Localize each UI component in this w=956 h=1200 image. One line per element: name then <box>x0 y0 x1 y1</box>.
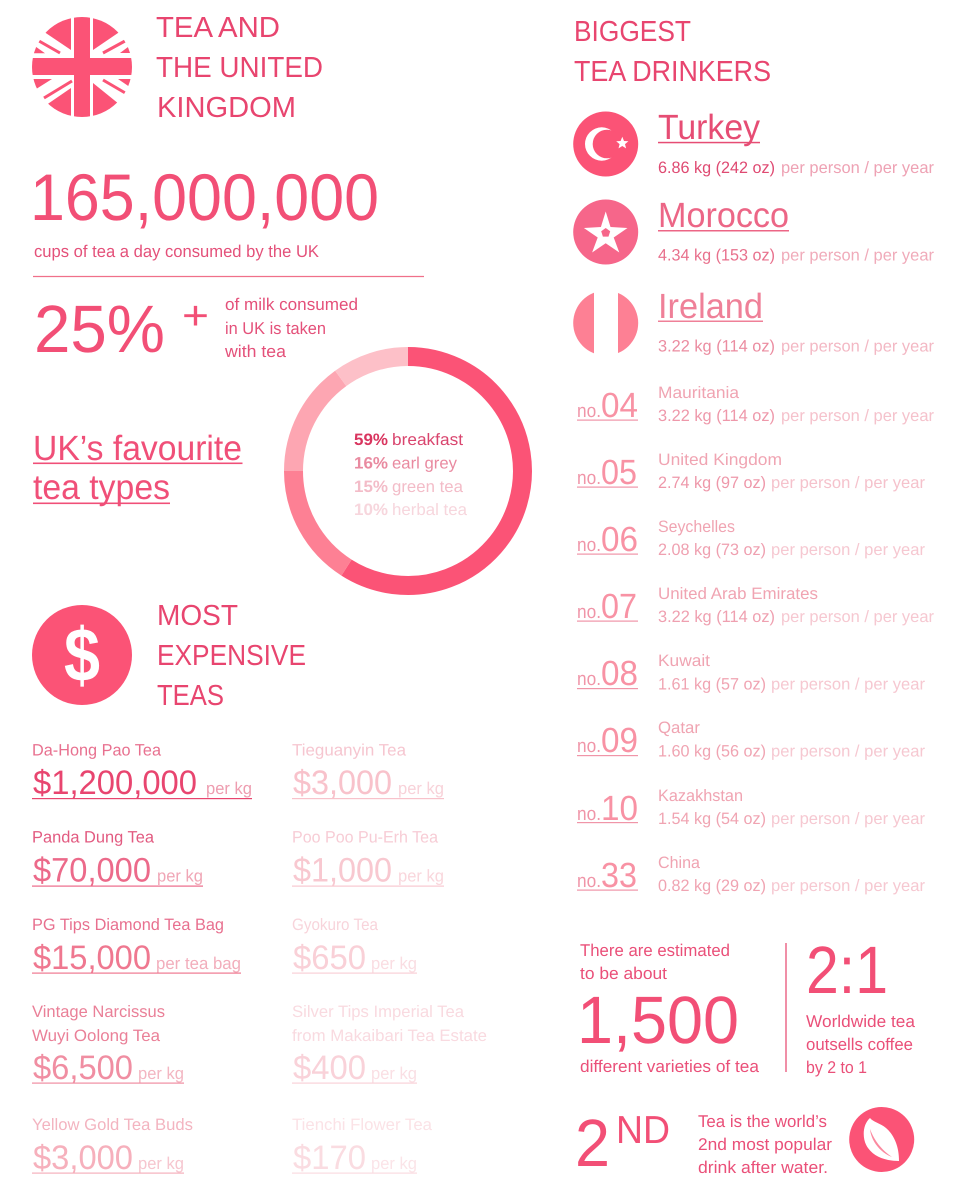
heading: most expensive teas <box>157 600 306 712</box>
expensive tea 3: per tea bag <box>156 954 241 973</box>
big stat: cups of tea a day: 165,000,000 <box>30 160 379 234</box>
country: ireland: 3.22 kg (114 oz) <box>658 338 775 356</box>
stat: 2nd <box>575 1106 670 1181</box>
donut legend: breakfast <box>392 431 463 449</box>
icon: dollar <box>32 605 132 705</box>
donut legend: herbal tea <box>392 501 468 519</box>
icon: union jack <box>32 17 132 117</box>
expensive tea 9: from Makaibari Tea Estate <box>292 1027 487 1045</box>
heading: biggest tea drinkers: BIGGEST <box>574 16 691 48</box>
icon: tea leaf <box>849 1107 914 1172</box>
icon: dollar: $ <box>64 613 100 698</box>
rank row: mauritania: no. <box>577 401 601 422</box>
rank row: seychelles: 06 <box>601 520 638 559</box>
rank row: united arab emirates: United Arab Emirates <box>658 585 818 603</box>
expensive tea 2: per kg <box>157 866 203 886</box>
stat: 2:1: Worldwide tea <box>806 1012 916 1031</box>
expensive tea 8: $650 <box>293 939 366 977</box>
country: ireland: per person / per year <box>781 338 934 356</box>
rank row: united kingdom: United Kingdom <box>658 451 782 469</box>
rank row: china: 33 <box>601 856 637 895</box>
stat: 1,500 varieties: 1,500 <box>577 983 739 1058</box>
expensive tea 8: per kg <box>371 954 417 973</box>
country: morocco: per person / per year <box>781 246 934 264</box>
title: tea and the united kingdom <box>156 12 323 124</box>
donut legend: 10% <box>354 501 388 519</box>
text: second most popular drink <box>698 1112 832 1177</box>
rank row: united kingdom: 2.74 kg (97 oz) <box>658 474 766 492</box>
expensive tea 8 <box>292 916 417 977</box>
rank row: kuwait: no. <box>577 669 601 690</box>
expensive tea 9 <box>292 1003 487 1087</box>
stat: 25% of milk: 25% <box>34 292 165 367</box>
stat: 1,500 varieties: to be about <box>580 964 667 983</box>
stat: 25% of milk: + <box>182 294 209 338</box>
stat: 25% of milk: with tea <box>224 342 287 361</box>
rank row: qatar: 1.60 kg (56 oz) <box>658 742 766 760</box>
heading: most expensive teas: TEAS <box>157 680 224 712</box>
icon: morocco flag <box>573 200 638 264</box>
donut legend <box>354 431 468 519</box>
rank row: seychelles: per person / per year <box>771 541 926 559</box>
expensive tea 4: per kg <box>138 1064 184 1083</box>
expensive tea 10 <box>292 1116 433 1177</box>
rank row: kazakhstan: per person / per year <box>771 810 926 828</box>
rank row: seychelles: Seychelles <box>658 518 735 536</box>
rank row: china: 0.82 kg (29 oz) <box>658 877 766 895</box>
expensive tea 9: $400 <box>293 1049 366 1087</box>
expensive tea 3: $15,000 <box>33 939 151 977</box>
expensive tea 10: per kg <box>371 1154 417 1173</box>
country: turkey: Turkey <box>658 108 760 147</box>
stat: 1,500 varieties: There are estimated <box>580 941 730 960</box>
donut legend: 15% <box>354 478 388 496</box>
rank row: qatar: per person / per year <box>771 742 926 760</box>
rank row: qatar: 09 <box>601 721 638 760</box>
heading: most expensive teas: EXPENSIVE <box>157 640 306 672</box>
rank row: china: China <box>658 854 701 872</box>
donut legend: 59% <box>354 431 388 449</box>
rank row: kuwait <box>577 652 926 694</box>
rank row: qatar: Qatar <box>658 719 700 737</box>
country: turkey: per person / per year <box>781 159 934 177</box>
stat: 2:1 <box>806 933 916 1077</box>
rank row: kazakhstan: no. <box>577 804 601 825</box>
expensive tea 6 <box>292 742 444 802</box>
expensive tea 2 <box>32 828 203 890</box>
rank row: united kingdom: per person / per year <box>771 474 926 492</box>
rank row: united arab emirates: 07 <box>601 587 637 626</box>
rank row: united arab emirates: per person / per year <box>781 608 934 626</box>
text: second most popular drink: drink after water. <box>698 1158 828 1177</box>
expensive tea 5: Yellow Gold Tea Buds <box>32 1116 193 1134</box>
expensive tea 2: Panda Dung Tea <box>32 828 155 846</box>
expensive tea 5: $3,000 <box>33 1139 133 1177</box>
rank row: mauritania: Mauritania <box>658 384 740 402</box>
donut legend: green tea <box>392 478 464 496</box>
rank row: kazakhstan: 1.54 kg (54 oz) <box>658 810 766 828</box>
rank row: kuwait: per person / per year <box>771 676 926 694</box>
expensive tea 9: per kg <box>371 1064 417 1083</box>
title: tea and the united kingdom: KINGDOM <box>157 92 296 124</box>
rank row: kazakhstan: 10 <box>601 789 638 828</box>
expensive tea 8: Gyokuro Tea <box>292 916 379 934</box>
country: turkey: 6.86 kg (242 oz) <box>658 159 775 177</box>
rank row: china: per person / per year <box>771 877 926 895</box>
rank row: mauritania: per person / per year <box>781 407 934 425</box>
big stat: cups of tea a day: cups of tea a day consumed by the UK <box>34 242 320 261</box>
stat: 1,500 varieties <box>577 941 760 1076</box>
rank row: kuwait: 1.61 kg (57 oz) <box>658 676 766 694</box>
expensive tea 3: PG Tips Diamond Tea Bag <box>32 916 224 934</box>
rank row: seychelles: 2.08 kg (73 oz) <box>658 541 766 559</box>
text: second most popular drink: 2nd most popular <box>698 1135 832 1154</box>
stat: 25% of milk <box>34 292 358 367</box>
expensive tea 1: per kg <box>206 779 252 798</box>
expensive tea 3 <box>32 916 241 977</box>
expensive tea 4: $6,500 <box>33 1049 133 1087</box>
country: ireland <box>658 287 934 356</box>
heading: uk's favourite tea types <box>33 429 242 507</box>
expensive tea 10: Tienchi Flower Tea <box>292 1116 433 1134</box>
country: morocco: Morocco <box>658 196 789 235</box>
rank row: qatar: no. <box>577 736 601 757</box>
rank row: seychelles <box>577 518 926 559</box>
rank row: mauritania <box>577 384 934 425</box>
rank row: qatar <box>577 719 926 760</box>
expensive tea 4: Vintage Narcissus <box>32 1003 165 1021</box>
donut chart: tea types <box>293 356 522 586</box>
rank row: seychelles: no. <box>577 535 601 556</box>
country: morocco <box>658 196 934 264</box>
icon: turkey flag <box>573 112 638 176</box>
expensive tea 4: Wuyi Oolong Tea <box>32 1027 161 1045</box>
rank row: united kingdom <box>577 451 926 492</box>
stat: 2nd: ND <box>616 1109 670 1152</box>
rank row: mauritania: 3.22 kg (114 oz) <box>658 407 775 425</box>
title: tea and the united kingdom: TEA AND <box>156 12 280 44</box>
expensive tea 6: $3,000 <box>293 764 392 802</box>
rank row: united arab emirates: no. <box>577 602 601 623</box>
rank row: kazakhstan <box>577 787 926 828</box>
heading: uk's favourite tea types: tea types <box>33 468 170 507</box>
rank row: china: no. <box>577 871 601 892</box>
rank row: kazakhstan: Kazakhstan <box>658 787 743 805</box>
expensive tea 5 <box>32 1116 193 1177</box>
heading: uk's favourite tea types: UK’s favourite <box>33 429 242 468</box>
expensive tea 7 <box>292 828 444 890</box>
donut legend: 16% <box>354 454 388 472</box>
rank row: united kingdom: 05 <box>601 453 637 492</box>
rank row: united kingdom: no. <box>577 468 601 489</box>
country: turkey <box>658 108 934 177</box>
expensive tea 6: per kg <box>398 779 444 798</box>
icon: ireland flag <box>573 292 638 354</box>
heading: biggest tea drinkers <box>574 16 771 88</box>
expensive tea 1: $1,200,000 <box>33 764 197 802</box>
stat: 2nd: 2 <box>575 1106 610 1181</box>
rank row: united arab emirates: 3.22 kg (114 oz) <box>658 608 775 626</box>
expensive tea 6: Tieguanyin Tea <box>292 742 407 760</box>
rank row: united arab emirates <box>577 585 934 626</box>
stat: 2:1: outsells coffee <box>806 1035 913 1054</box>
expensive tea 7: Poo Poo Pu-Erh Tea <box>292 828 439 846</box>
stat: 2:1: 2:1 <box>806 933 888 1008</box>
expensive tea 1: Da-Hong Pao Tea <box>32 742 162 760</box>
expensive tea 7: per kg <box>398 866 444 886</box>
stat: 25% of milk: of milk consumed <box>225 295 358 314</box>
expensive tea 9: Silver Tips Imperial Tea <box>292 1003 465 1021</box>
expensive tea 10: $170 <box>293 1139 366 1177</box>
stat: 2:1: by 2 to 1 <box>806 1058 867 1077</box>
title: tea and the united kingdom: THE UNITED <box>156 52 323 84</box>
rank row: kuwait: 08 <box>601 654 638 693</box>
country: morocco: 4.34 kg (153 oz) <box>658 246 775 264</box>
stat: 1,500 varieties: different varieties of tea <box>580 1057 760 1076</box>
expensive tea 5: per kg <box>138 1154 184 1173</box>
rank row: china <box>577 854 926 895</box>
stat: 25% of milk: in UK is taken <box>225 319 326 338</box>
country: ireland: Ireland <box>658 287 763 326</box>
rank row: kuwait: Kuwait <box>658 652 710 670</box>
text: second most popular drink: Tea is the world’s <box>698 1112 827 1131</box>
expensive tea 4 <box>32 1003 184 1087</box>
donut legend: earl grey <box>392 454 458 472</box>
rank row: mauritania: 04 <box>601 386 638 425</box>
heading: biggest tea drinkers: TEA DRINKERS <box>574 56 771 88</box>
expensive tea 1 <box>32 742 252 802</box>
expensive tea 7: $1,000 <box>293 852 392 890</box>
heading: most expensive teas: MOST <box>157 600 238 632</box>
expensive tea 2: $70,000 <box>33 852 151 890</box>
